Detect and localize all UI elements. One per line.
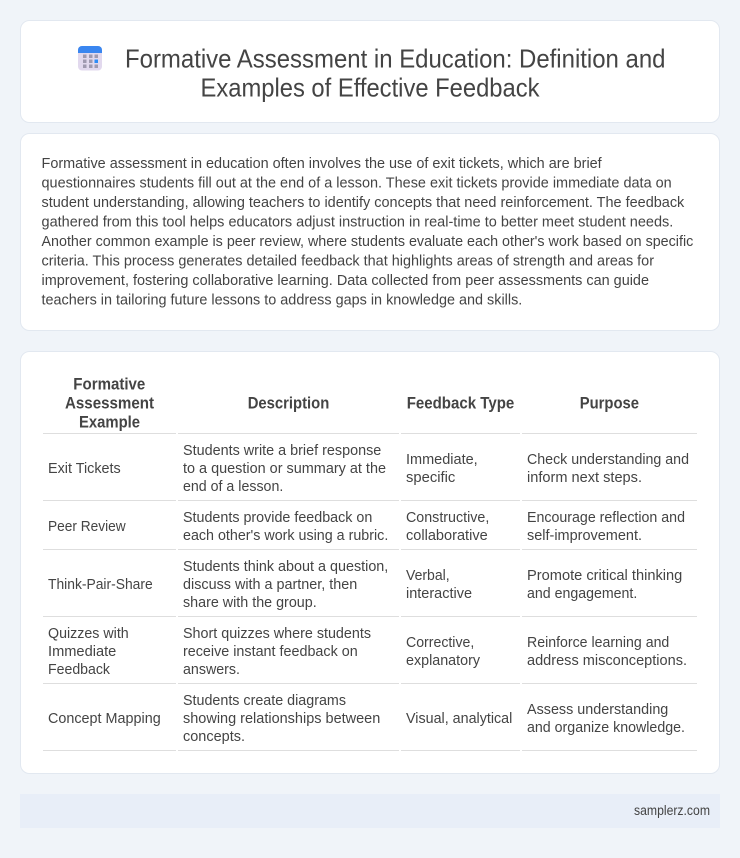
table row: Quizzes with Immediate Feedback: Corrective, — [406, 635, 474, 651]
table row: Exit Tickets: to a question or summary at the — [183, 461, 386, 477]
panel: title card — [20, 20, 720, 122]
table row: Concept Mapping — [48, 693, 685, 745]
table header row: Purpose — [580, 394, 639, 412]
table row: Think-Pair-Share: discuss with a partner, then — [183, 577, 357, 593]
table row: Exit Tickets: Check understanding and — [527, 452, 689, 468]
footer bar: samplerz.com — [634, 803, 710, 818]
table row: Quizzes with Immediate Feedback: address misconceptions. — [527, 653, 687, 669]
table row: Peer Review: Peer Review — [48, 519, 126, 535]
text block: intro — [42, 156, 693, 308]
table row: Quizzes with Immediate Feedback: Immediate — [48, 644, 116, 660]
table row: Concept Mapping: Concept Mapping — [48, 711, 161, 727]
table row: Quizzes with Immediate Feedback — [48, 626, 687, 678]
table header row: Example — [79, 414, 140, 432]
table row: Peer Review: Constructive, — [406, 510, 489, 526]
table row: Peer Review: Students provide feedback on — [183, 510, 372, 526]
table row: Exit Tickets — [48, 443, 689, 495]
table row: Think-Pair-Share: Verbal, — [406, 568, 450, 584]
table row: Think-Pair-Share: Think-Pair-Share — [48, 577, 153, 593]
table row: Exit Tickets: Students write a brief response — [183, 443, 381, 459]
table row: Think-Pair-Share: and engagement. — [527, 586, 637, 602]
table row: Peer Review: self-improvement. — [527, 528, 642, 544]
table row: Quizzes with Immediate Feedback: Feedback — [48, 662, 111, 678]
table row: Exit Tickets: Immediate, — [406, 452, 478, 468]
table header row: Formative — [73, 376, 145, 394]
table row: Think-Pair-Share: Students think about a question, — [183, 559, 388, 575]
table row: Think-Pair-Share: interactive — [406, 586, 472, 602]
table row: Think-Pair-Share: Promote critical thinking — [527, 568, 682, 584]
text block: intro: gathered from this tool helps educators adjust instruction in real-time to better meet student needs. — [42, 214, 673, 230]
title — [125, 44, 666, 102]
table row: Concept Mapping: Visual, analytical — [406, 711, 512, 727]
table header row: Description — [248, 394, 329, 412]
table row: Quizzes with Immediate Feedback: answers. — [183, 662, 240, 678]
table row: Quizzes with Immediate Feedback: Short quizzes where students — [183, 626, 371, 642]
text block: intro: questionnaires students fill out at the end of a lesson. These exit tickets provide immediate data on — [42, 176, 672, 192]
table row: Exit Tickets: inform next steps. — [527, 470, 642, 486]
panel: intro paragraph — [20, 134, 720, 330]
table row: Peer Review — [48, 510, 685, 544]
table row: Concept Mapping: Students create diagrams — [183, 693, 346, 709]
title: Formative Assessment in Education: Definition and — [125, 44, 666, 74]
table row: Think-Pair-Share — [48, 559, 682, 611]
table row: Quizzes with Immediate Feedback: Quizzes with — [48, 626, 129, 642]
table header row: Feedback Type — [407, 394, 514, 412]
text block: intro: Formative assessment in education often involves the use of exit tickets, which are brief — [42, 156, 603, 172]
table row: Concept Mapping: Assess understanding — [527, 702, 668, 718]
text block: intro: improvement, fostering collaborative learning. Data collected from peer assessments can guide — [42, 273, 649, 289]
panel: table card — [20, 352, 720, 774]
table row: Exit Tickets: end of a lesson. — [183, 479, 283, 495]
table row: Concept Mapping: and organize knowledge. — [527, 720, 685, 736]
table row: Exit Tickets: Exit Tickets — [48, 461, 121, 477]
footer bar — [20, 794, 720, 828]
text block: intro: student understanding, allowing teachers to identify concepts that need reinforcement. The feedback — [42, 195, 685, 211]
table row: Exit Tickets: specific — [406, 470, 455, 486]
table header row — [65, 376, 639, 432]
table row: Concept Mapping: showing relationships between — [183, 711, 380, 727]
table row: Quizzes with Immediate Feedback: receive instant feedback on — [183, 644, 358, 660]
text block: intro: teachers in tailoring future lessons to address gaps in knowledge and skills. — [42, 292, 522, 308]
table row: Concept Mapping: concepts. — [183, 729, 245, 745]
text block: intro: criteria. This process generates detailed feedback that highlights areas of strength and areas for — [42, 254, 654, 270]
table row: Quizzes with Immediate Feedback: explanatory — [406, 653, 481, 669]
table row: Think-Pair-Share: share with the group. — [183, 595, 317, 611]
table header row: Assessment — [65, 394, 154, 412]
table row: Peer Review: each other's work using a rubric. — [183, 528, 388, 544]
table row: Quizzes with Immediate Feedback: Reinforce learning and — [527, 635, 669, 651]
title: Examples of Effective Feedback — [200, 72, 540, 102]
table row: Peer Review: Encourage reflection and — [527, 510, 685, 526]
table row: Peer Review: collaborative — [406, 528, 488, 544]
text block: intro: Another common example is peer review, where students evaluate each other's work based on specific — [42, 234, 693, 250]
icon: calendar — [78, 46, 102, 70]
